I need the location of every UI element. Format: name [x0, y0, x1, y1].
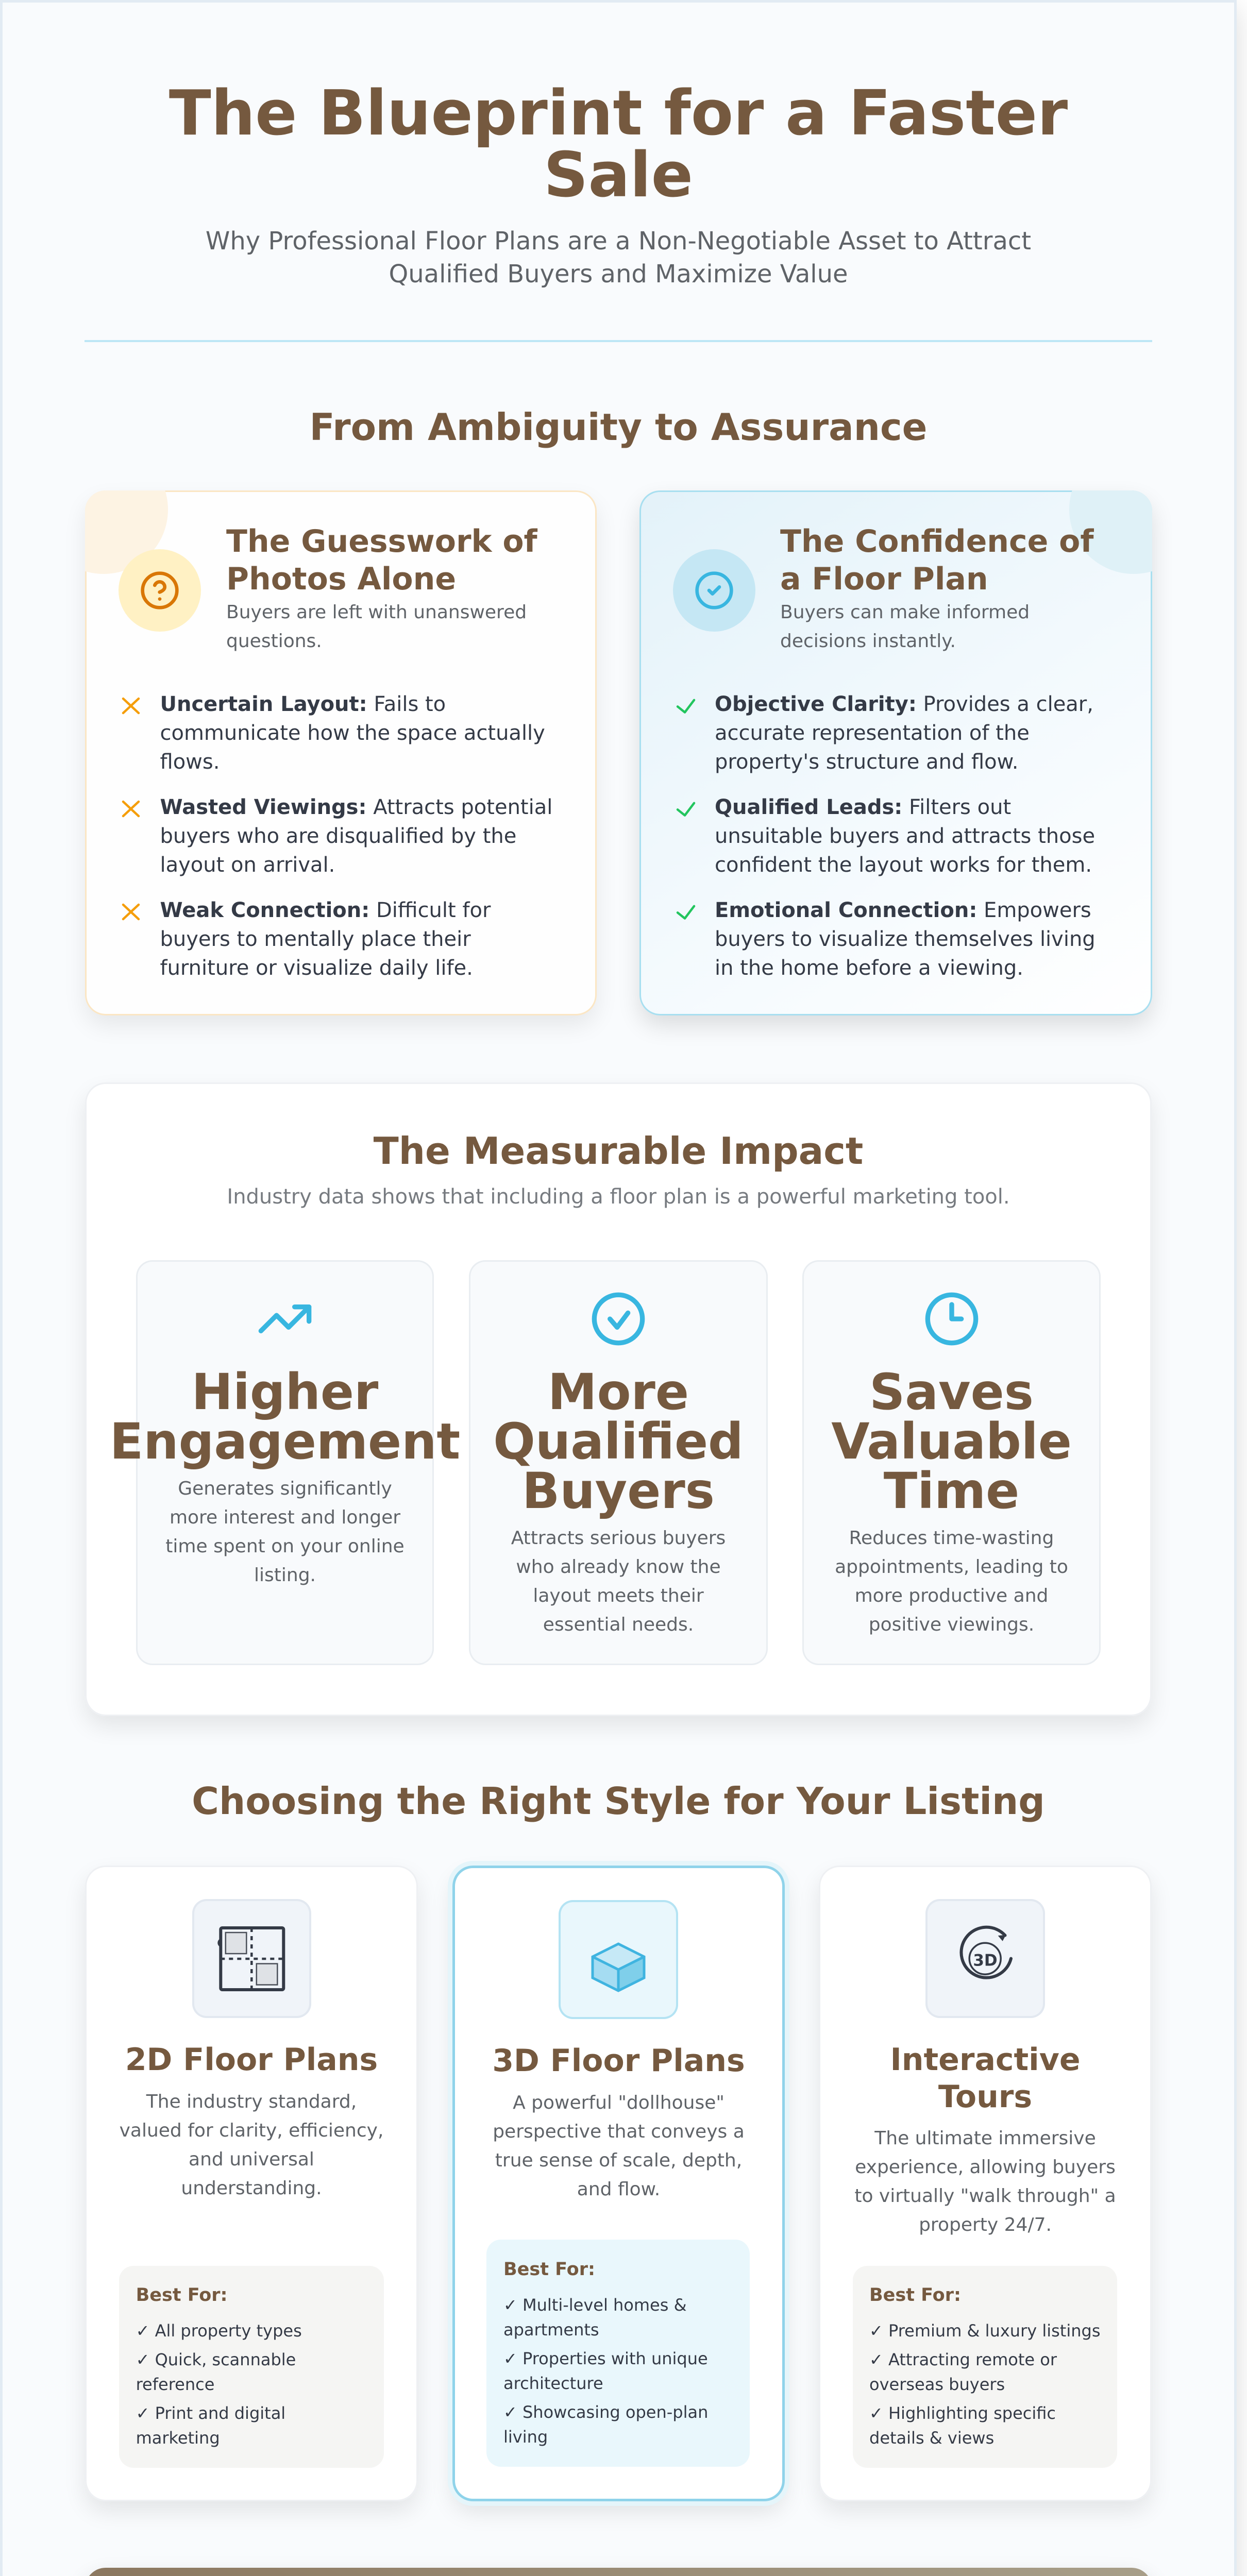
list item: wasted viewings: Wasted Viewings: Attracts potential — [160, 795, 552, 819]
card title — [780, 523, 1094, 597]
best for list: apartments — [503, 2320, 599, 2340]
list item: qualified leads: Qualified Leads: Filters out — [715, 795, 1011, 819]
stat title: Valuable — [831, 1413, 1072, 1470]
stat title: Engagement — [110, 1413, 460, 1470]
card description: A powerful "dollhouse" — [513, 2092, 724, 2113]
stat description: essential needs. — [543, 1614, 694, 1635]
list item: uncertain layout: flows. — [160, 750, 220, 774]
list item: uncertain layout — [122, 692, 545, 774]
card description: The industry standard, — [146, 2091, 357, 2112]
card title: 3D Floor Plans — [492, 2043, 745, 2079]
list item: weak connection: buyers to mentally place their — [160, 927, 471, 951]
icon: check circle — [592, 1292, 645, 1346]
best for list — [503, 2293, 687, 2449]
stat title: Saves — [869, 1363, 1034, 1421]
card subtitle: questions. — [226, 631, 322, 652]
list item: qualified leads — [676, 795, 1095, 877]
card subtitle: Buyers can make informed — [780, 602, 1030, 623]
list item: emotional connection: in the home before a viewing. — [715, 956, 1023, 980]
stat description: time spent on your online — [165, 1535, 405, 1557]
card description: property 24/7. — [919, 2214, 1052, 2235]
list item: objective clarity: accurate representation of the — [715, 721, 1030, 745]
list item: qualified leads: unsuitable buyers and attracts those — [715, 824, 1095, 848]
best for list: ✓ Properties with unique — [503, 2349, 708, 2368]
heading: The Measurable Impact — [374, 1129, 863, 1173]
card subtitle — [226, 602, 527, 652]
list item: weak connection — [122, 899, 491, 980]
card title: The Guesswork of — [226, 523, 537, 560]
title: Sale — [544, 140, 693, 211]
icon: 3D cube — [559, 1900, 678, 2019]
icon: check circle — [673, 549, 755, 632]
stat description: positive viewings. — [869, 1614, 1034, 1635]
stat card: saves valuable time — [802, 1260, 1101, 1665]
stat title — [831, 1363, 1072, 1520]
best for list: ✓ Attracting remote or — [869, 2350, 1057, 2369]
best for list: overseas buyers — [869, 2375, 1005, 2394]
panel: 2D floor plans — [85, 1866, 418, 2501]
card description — [493, 2092, 745, 2200]
icon: 2D floor plan — [192, 1899, 311, 2018]
card description: and flow. — [577, 2178, 660, 2200]
list item: uncertain layout: Uncertain Layout: Fails to — [160, 692, 446, 716]
best for heading: Best For: — [503, 2259, 595, 2280]
best for list — [136, 2321, 302, 2448]
stat description: Reduces time-wasting — [849, 1527, 1054, 1549]
card title: a Floor Plan — [780, 561, 988, 597]
subtitle: Qualified Buyers and Maximize Value — [389, 260, 848, 289]
list item: wasted viewings: layout on arrival. — [160, 853, 335, 877]
list item: wasted viewings: buyers who are disqualified by the — [160, 824, 516, 848]
stat description: appointments, leading to — [835, 1556, 1068, 1578]
best for list: living — [503, 2427, 548, 2447]
best for list: reference — [136, 2375, 214, 2394]
icon: 3D tour: 3D — [973, 1952, 998, 1970]
card title: Tours — [938, 2079, 1032, 2115]
card title: Photos Alone — [226, 561, 456, 597]
stat title — [110, 1363, 460, 1470]
card description — [819, 2124, 1152, 2240]
list item: emotional connection: Emotional Connection: Empowers — [715, 899, 1091, 922]
stat card: higher engagement — [136, 1260, 434, 1665]
stat title: Buyers — [522, 1462, 715, 1520]
stat title — [493, 1363, 744, 1520]
title: The Blueprint for a Faster — [169, 78, 1068, 149]
stat description: more productive and — [855, 1585, 1048, 1606]
stat title: Time — [884, 1462, 1019, 1520]
heading: from ambiguity to assurance: From Ambiguity to Assurance — [309, 405, 928, 449]
card description: perspective that conveys a — [493, 2121, 745, 2142]
best for list: ✓ Showcasing open-plan — [503, 2402, 708, 2422]
list item: qualified leads: confident the layout works for them. — [715, 853, 1092, 877]
best for list: architecture — [503, 2374, 603, 2393]
stat description: Generates significantly — [178, 1478, 392, 1499]
stat title: Higher — [192, 1363, 378, 1421]
icon: 3D tour — [925, 1899, 1045, 2018]
stat description: listing. — [254, 1564, 316, 1586]
stat title: More — [548, 1363, 689, 1421]
stat description: who already know the — [516, 1556, 721, 1578]
card description: to virtually "walk through" a — [854, 2185, 1116, 2207]
card description — [120, 2091, 383, 2199]
best for list: marketing — [136, 2428, 220, 2448]
best for list: ✓ All property types — [136, 2321, 302, 2341]
section subtitle: Industry data shows that including a floor plan is a powerful marketing tool. — [227, 1185, 1010, 1209]
best for list: ✓ Multi-level homes & — [503, 2295, 687, 2315]
list item: emotional connection — [676, 899, 1096, 980]
panel: measurable impact — [85, 1082, 1152, 1716]
stat description — [165, 1478, 405, 1586]
list item: emotional connection: buyers to visualize themselves living — [715, 927, 1096, 951]
best for list: ✓ Premium & luxury listings — [869, 2321, 1100, 2341]
best for box — [853, 2266, 1117, 2468]
list item: objective clarity: property's structure and flow. — [715, 750, 1018, 774]
best for list: ✓ Highlighting specific — [869, 2403, 1056, 2423]
card title: The Confidence of — [780, 523, 1093, 560]
best for heading: Best For: — [136, 2285, 228, 2306]
heading: choosing the right style: Choosing the Right Style for Your Listing — [192, 1780, 1045, 1823]
list item: weak connection: furniture or visualize daily life. — [160, 956, 473, 980]
card subtitle — [780, 602, 1030, 652]
stat description: more interest and longer — [170, 1506, 400, 1528]
best for list: ✓ Print and digital — [136, 2403, 285, 2423]
icon: question mark — [119, 549, 201, 632]
stat description: Attracts serious buyers — [511, 1527, 726, 1549]
list item: wasted viewings — [122, 795, 552, 877]
card description: true sense of scale, depth, — [495, 2149, 742, 2171]
best for list: ✓ Quick, scannable — [136, 2350, 296, 2369]
panel: interactive tours — [819, 1866, 1152, 2501]
card description: valued for clarity, efficiency, — [120, 2120, 383, 2141]
panel: confidence of a floor plan — [639, 490, 1152, 1015]
title — [169, 78, 1068, 211]
subtitle: Why Professional Floor Plans are a Non-Negotiable Asset to Attract — [206, 227, 1031, 256]
card description: understanding. — [181, 2177, 322, 2199]
card title — [819, 2041, 1152, 2115]
panel: hallmarks of a professional floor plan — [85, 2568, 1152, 2576]
card title: 2D Floor Plans — [125, 2042, 378, 2078]
best for list: details & views — [869, 2428, 994, 2448]
best for heading: Best For: — [869, 2285, 961, 2306]
best for list — [869, 2318, 1100, 2458]
icon: clock — [925, 1292, 978, 1346]
card title: Interactive — [890, 2042, 1081, 2078]
card subtitle: decisions instantly. — [780, 631, 956, 652]
stat description: layout meets their — [533, 1585, 704, 1606]
card description: and universal — [189, 2148, 314, 2170]
list item: objective clarity: Objective Clarity: Provides a clear, — [715, 692, 1093, 716]
stat description — [511, 1527, 726, 1635]
stat card: more qualified buyers — [469, 1260, 768, 1665]
card description: experience, allowing buyers — [855, 2157, 1116, 2178]
subtitle — [206, 227, 1031, 289]
panel: 3D floor plans (featured) — [452, 1866, 785, 2501]
stat title: Qualified — [493, 1413, 744, 1470]
icon: trending up — [259, 1304, 311, 1333]
card subtitle: Buyers are left with unanswered — [226, 602, 527, 623]
best for box — [119, 2266, 384, 2468]
best for box — [486, 2240, 750, 2467]
card title — [226, 523, 538, 597]
panel: guesswork of photos alone — [85, 490, 597, 1015]
card description: The ultimate immersive — [874, 2128, 1096, 2149]
list item: weak connection: Weak Connection: Difficult for — [160, 899, 491, 922]
list item: objective clarity — [676, 692, 1093, 774]
stat description — [835, 1527, 1068, 1635]
list item: uncertain layout: communicate how the space actually — [160, 721, 545, 745]
